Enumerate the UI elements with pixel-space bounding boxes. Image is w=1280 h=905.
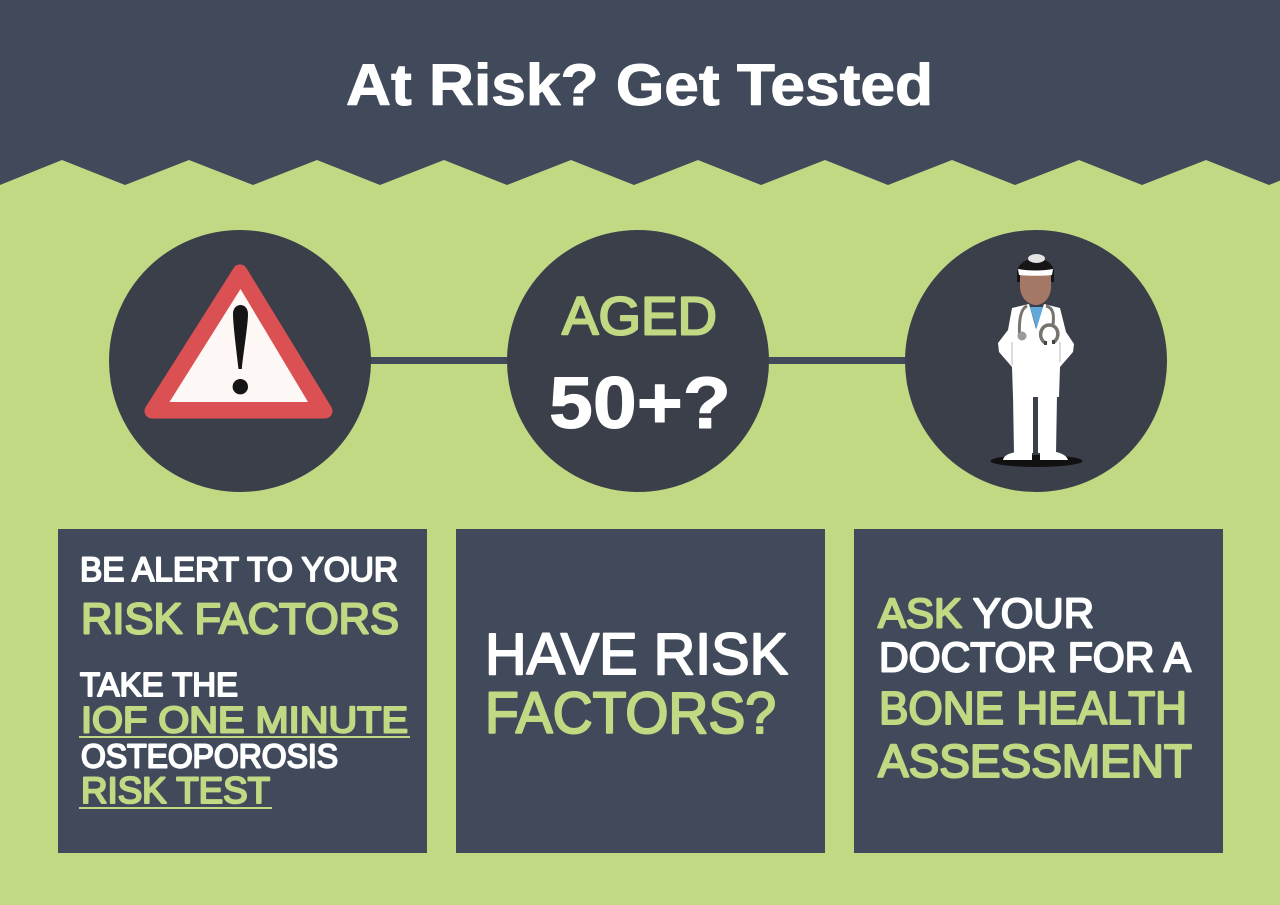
text: assessment: ASSESSMENT [878,735,1192,787]
link: risk test: RISK TEST [81,770,270,811]
text: aged: AGED [562,286,717,346]
hair [1017,258,1054,282]
text: take the: TAKE THE [80,666,238,703]
circle: aged 50+ [507,230,769,492]
shoes [1003,450,1032,460]
stethoscope [1019,306,1053,334]
coat [998,304,1074,397]
headband [1018,269,1053,276]
circle: warning [109,230,371,492]
coat fold lines [1012,342,1060,365]
text: have risk: HAVE RISK [485,622,788,687]
text: risk factors: RISK FACTORS [81,594,399,644]
icon: doctor [990,254,1082,467]
text: bone health: BONE HEALTH [879,682,1187,734]
text: doctor for a: DOCTOR FOR A [879,634,1191,680]
title: At Risk? Get Tested [346,53,933,118]
icon: warning triangle [152,272,325,411]
connector line [360,357,920,364]
text: be alert: BE ALERT TO YOUR [80,551,398,589]
text: factors?: FACTORS? [485,681,776,746]
text: osteoporosis: OSTEOPOROSIS [81,738,338,774]
face [1020,274,1051,305]
circle: doctor [905,230,1167,492]
legs [1013,395,1033,453]
panel: risk factors [58,529,427,853]
panel: have risk factors [456,529,825,853]
text: ask your: ASK YOUR [878,590,1094,636]
header band [0,0,1280,185]
text: 50+?: 50+? [549,363,731,444]
underline [79,807,272,809]
underline [79,736,410,738]
head mirror [1028,254,1045,263]
link: iof one minute: IOF ONE MINUTE [81,700,408,740]
panel: ask your doctor [854,529,1223,853]
shirt [1030,307,1043,329]
